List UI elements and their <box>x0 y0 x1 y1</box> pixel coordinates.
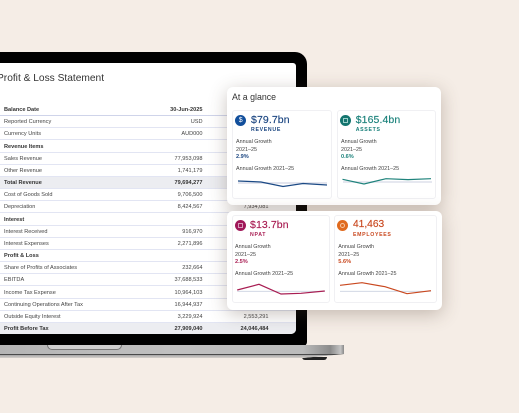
icon: employees <box>337 220 348 231</box>
growth text: Annual Growth <box>235 244 271 250</box>
financial table: 37,688,533 <box>174 277 202 283</box>
chart caption: Annual Growth 2021–25 <box>236 166 294 172</box>
financial table: 77,953,098 <box>174 156 202 162</box>
chart caption: Annual Growth 2021–25 <box>235 271 293 277</box>
growth value: 2.9% <box>236 154 249 160</box>
icon: dollar: $ <box>239 117 243 124</box>
financial table: Outside Equity Interest <box>4 314 61 320</box>
financial table: 16,944,937 <box>174 302 202 308</box>
financial table: 24,046,484 <box>240 326 268 332</box>
icon: npat <box>234 220 246 231</box>
laptop notch <box>47 345 122 350</box>
financial table: Other Revenue <box>4 168 42 174</box>
financial table <box>0 107 296 334</box>
financial table: 27,909,040 <box>174 326 202 332</box>
financial table: 9,706,500 <box>178 192 202 198</box>
growth text: Annual Growth <box>338 244 374 250</box>
panel heading: At a glance <box>232 92 276 102</box>
financial table: Revenue Items <box>4 144 43 150</box>
growth value: 2.5% <box>235 259 248 265</box>
revenue label: REVENUE <box>251 127 281 133</box>
growth text: Annual Growth <box>236 139 272 145</box>
chart caption: Annual Growth 2021–25 <box>338 271 396 277</box>
financial table: 2,553,291 <box>244 314 268 320</box>
financial table: 1,741,179 <box>178 168 202 174</box>
assets label: ASSETS <box>356 127 381 133</box>
card: assets <box>337 110 436 199</box>
growth text: Annual Growth <box>341 139 377 145</box>
financial table: 2,271,896 <box>178 241 202 247</box>
financial table: Income Tax Expense <box>4 290 56 296</box>
financial table: 8,424,567 <box>178 204 202 210</box>
laptop foot <box>302 357 327 360</box>
card: employees <box>334 215 437 303</box>
employees value: 41,463 <box>353 219 384 230</box>
sparkline: employees <box>340 282 432 294</box>
sparkline: assets <box>342 178 432 185</box>
laptop lid bezel <box>0 52 307 346</box>
statement title: Profit & Loss Statement <box>0 73 104 84</box>
growth value: 5.6% <box>338 259 351 265</box>
financial table: EBITDA <box>4 277 24 283</box>
financial table: 232,664 <box>182 265 202 271</box>
financial table: 10,964,103 <box>174 290 202 296</box>
sparkline: revenue <box>238 180 327 188</box>
assets value: $165.4bn <box>356 114 400 126</box>
financial table: Share of Profits of Associates <box>4 265 77 271</box>
financial table: Depreciation <box>4 204 35 210</box>
laptop base <box>0 345 344 358</box>
panel: at a glance <box>227 87 441 205</box>
base lower lip <box>0 354 344 358</box>
financial table: Interest Received <box>4 229 48 235</box>
growth text <box>338 244 374 258</box>
financial table: Interest Expenses <box>4 241 49 247</box>
financial table: USD <box>191 119 202 125</box>
screen: profit and loss statement <box>0 63 296 334</box>
financial table: AUD000 <box>181 131 202 137</box>
financial table: Interest <box>4 216 24 222</box>
growth value: 0.6% <box>341 154 354 160</box>
growth text <box>236 139 272 153</box>
growth text: 2021–25 <box>236 147 257 153</box>
growth text <box>341 139 377 153</box>
financial table: 30-Jun-2025 <box>170 107 202 113</box>
card: revenue <box>232 110 332 199</box>
growth text: 2021–25 <box>338 252 359 258</box>
growth text: 2021–25 <box>341 147 362 153</box>
financial table: Cost of Goods Sold <box>4 192 53 198</box>
chart caption: Annual Growth 2021–25 <box>341 166 399 172</box>
financial table: 916,970 <box>182 229 202 235</box>
employees label: EMPLOYEES <box>353 232 392 238</box>
financial table: 7,934,081 <box>244 204 268 210</box>
icon: assets <box>340 115 351 126</box>
financial table: 3,229,924 <box>178 314 202 320</box>
revenue value: $79.7bn <box>251 114 290 126</box>
financial table: 79,694,277 <box>174 180 202 186</box>
npat label: NPAT <box>250 232 266 238</box>
financial table: Continuing Operations After Tax <box>4 302 83 308</box>
financial table: Total Revenue <box>4 180 42 186</box>
financial table: Sales Revenue <box>4 156 42 162</box>
laptop <box>0 52 344 360</box>
financial table: Balance Date <box>4 107 39 113</box>
npat value: $13.7bn <box>250 219 289 231</box>
financial table: Profit & Loss <box>4 253 39 259</box>
growth text: 2021–25 <box>235 252 256 258</box>
growth text <box>235 244 271 258</box>
sparkline: npat <box>237 284 325 295</box>
financial table: Currency Units <box>4 131 41 137</box>
financial table: Reported Currency <box>4 119 51 125</box>
financial table: Profit Before Tax <box>4 326 49 332</box>
icon: dollar <box>235 115 246 126</box>
card: npat <box>232 215 330 303</box>
panel: second row of metrics <box>227 211 442 310</box>
